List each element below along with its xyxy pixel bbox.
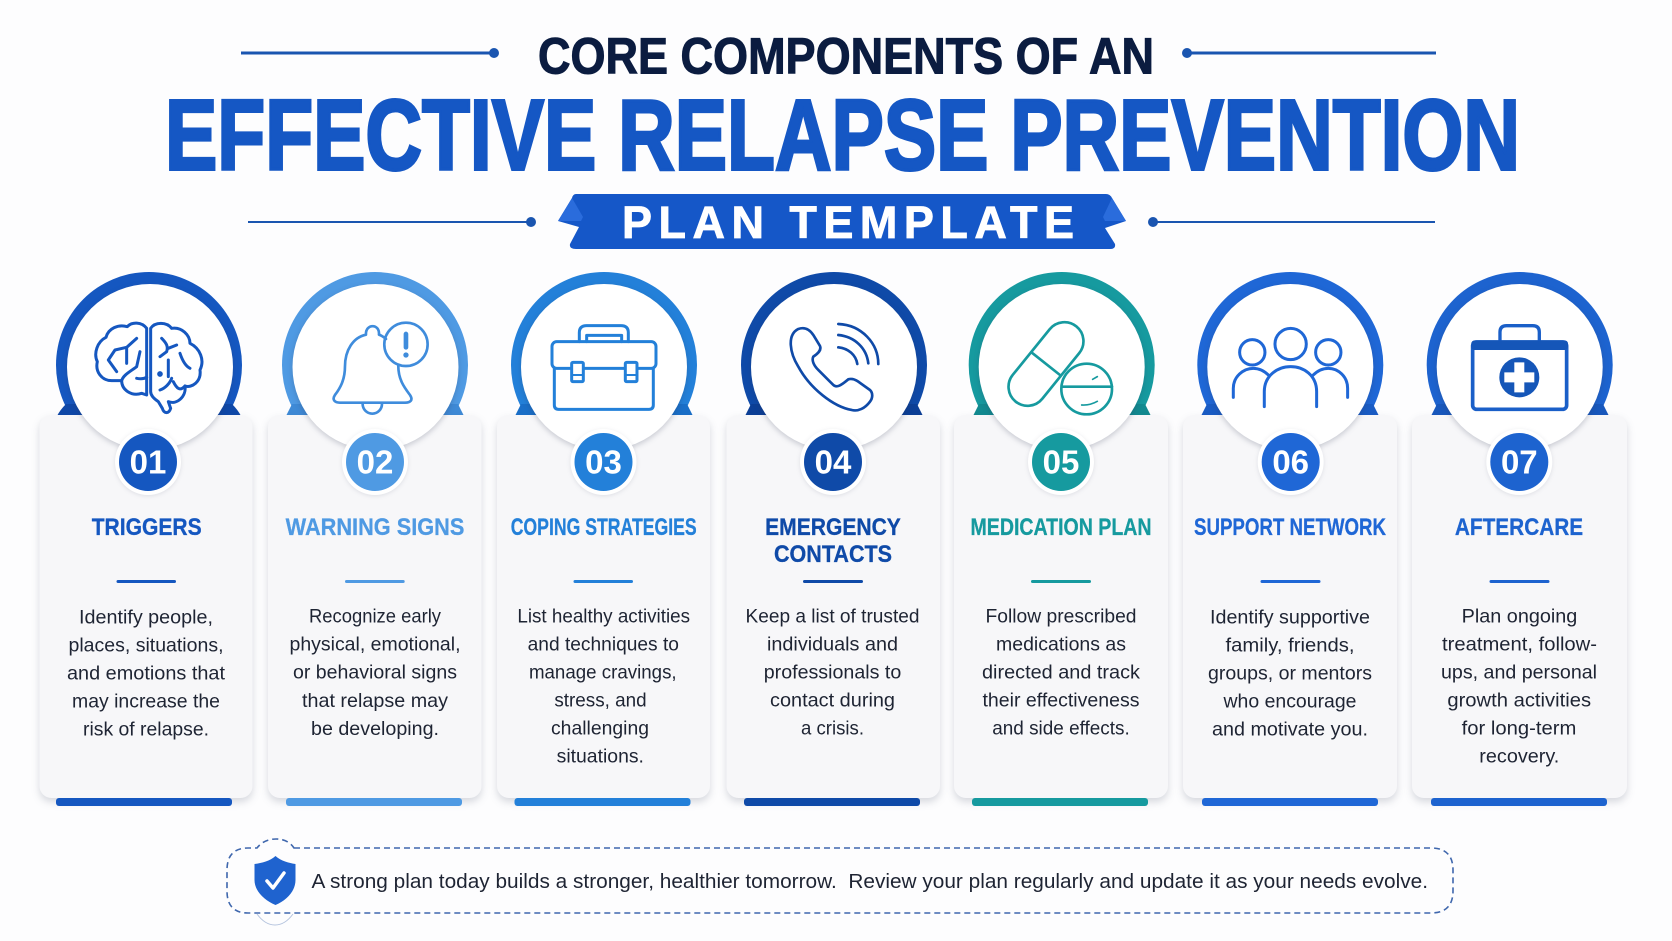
- text 04: [746, 606, 920, 740]
- text 01: may increase the: [72, 690, 220, 712]
- text 06: Identify supportive: [1210, 606, 1370, 628]
- text 01: [67, 606, 226, 740]
- number badge 02: 02: [357, 444, 393, 480]
- icon: pills: [1001, 314, 1112, 414]
- panel: 03 coping strategies: [497, 272, 710, 806]
- divider 01: [116, 580, 176, 583]
- text 06: and motivate you.: [1212, 718, 1368, 740]
- icon disc 03: [521, 284, 687, 450]
- banner: plan template: [248, 194, 1435, 249]
- number badge 04: 04: [815, 444, 852, 480]
- text 07: recovery.: [1479, 746, 1559, 768]
- icon disc 07: [1437, 284, 1603, 450]
- ring 03: [511, 272, 697, 458]
- title line: core components: CORE COMPONENTS OF AN: [538, 28, 1154, 84]
- ring 01: [56, 272, 242, 458]
- text 06: who encourage: [1223, 690, 1356, 712]
- divider 04: [803, 580, 863, 583]
- ring 06: [1197, 272, 1383, 458]
- text 06: [1208, 606, 1372, 740]
- number badge 05: [1028, 429, 1094, 495]
- text 02: that relapse may: [302, 690, 448, 712]
- title line: core components: [241, 28, 1436, 84]
- text 04: professionals to: [764, 662, 901, 684]
- divider 07: [1490, 580, 1550, 583]
- icon: people group: [1233, 328, 1348, 407]
- text 07: for long-term: [1462, 718, 1576, 740]
- number badge 07: [1486, 429, 1552, 495]
- text 05: their effectiveness: [982, 690, 1140, 712]
- number badge 03: 03: [585, 444, 622, 480]
- text 04: contact during: [770, 690, 895, 712]
- heading 04: CONTACTS: [774, 541, 892, 568]
- callout: footer message: [227, 839, 1453, 925]
- heading 06: SUPPORT NETWORK: [1194, 514, 1387, 541]
- card 06: [1183, 415, 1397, 806]
- icon: first aid kit: [1471, 326, 1568, 409]
- divider 02: [345, 580, 405, 583]
- number badge 01: [115, 429, 181, 495]
- panel: 02 warning signs: [268, 272, 482, 806]
- dashed callout frame: [227, 839, 1453, 925]
- text 05: medications as: [996, 634, 1126, 656]
- number badge 01: 01: [130, 444, 166, 480]
- text 01: places, situations,: [68, 634, 224, 656]
- text 04: a crisis.: [801, 718, 864, 740]
- text 03: and techniques to: [528, 634, 679, 656]
- card 03: [497, 415, 710, 806]
- text 04: individuals and: [767, 634, 898, 656]
- text 07: growth activities: [1447, 690, 1591, 712]
- icon disc 01: [67, 284, 233, 450]
- icon: brain: [96, 323, 202, 413]
- text 03: stress, and: [554, 690, 647, 712]
- ring 07: [1427, 272, 1613, 458]
- footer text: A strong plan today builds a stronger, healthier tomorrow. Review your plan regularly and update it as your needs evolve.: [312, 870, 1428, 893]
- number badge 04: [800, 429, 866, 495]
- icon disc 02: [292, 284, 458, 450]
- panel: 06 support network: [1183, 272, 1397, 806]
- text 02: or behavioral signs: [293, 662, 457, 684]
- text 03: manage cravings,: [529, 662, 677, 684]
- icon: phone with signal: [791, 324, 878, 410]
- number badge 05: 05: [1043, 444, 1079, 480]
- divider 03: [574, 580, 633, 583]
- text 01: Identify people,: [79, 606, 213, 628]
- text 02: [290, 606, 460, 740]
- icon: shield check: [254, 856, 296, 905]
- panel: 01 triggers: [40, 272, 252, 806]
- number badge 06: 06: [1272, 444, 1309, 480]
- text 07: treatment, follow-: [1442, 634, 1597, 656]
- card 01: [40, 415, 252, 806]
- text 05: directed and track: [982, 662, 1140, 684]
- heading 03: COPING STRATEGIES: [511, 514, 697, 541]
- text 02: physical, emotional,: [290, 634, 460, 656]
- card 02: [268, 415, 482, 806]
- number badge 02: [342, 429, 408, 495]
- ring 05: [969, 272, 1155, 458]
- icon: bell with alert: [334, 323, 428, 414]
- text 03: challenging: [551, 718, 649, 740]
- text 03: [517, 606, 690, 768]
- heading 07: AFTERCARE: [1455, 514, 1583, 541]
- text 05: and side effects.: [992, 718, 1130, 740]
- number badge 07: 07: [1501, 444, 1538, 480]
- banner: plan template: PLAN TEMPLATE: [622, 197, 1074, 248]
- text 05: [982, 606, 1140, 740]
- heading 04: EMERGENCY: [765, 514, 901, 541]
- heading 04: [765, 514, 901, 568]
- text 02: Recognize early: [309, 606, 441, 628]
- text 03: situations.: [557, 746, 644, 768]
- heading 01: TRIGGERS: [92, 514, 202, 541]
- text 07: ups, and personal: [1441, 662, 1597, 684]
- heading 05: MEDICATION PLAN: [970, 514, 1152, 541]
- card 05: [954, 415, 1168, 806]
- text 06: groups, or mentors: [1208, 662, 1372, 684]
- text 04: Keep a list of trusted: [746, 606, 920, 628]
- text 03: List healthy activities: [517, 606, 690, 628]
- panel: 05 medication plan: [954, 272, 1168, 806]
- text 07: [1441, 606, 1597, 768]
- panel: 04 emergency contacts: [726, 272, 940, 806]
- card 04: [726, 415, 940, 806]
- number badge 03: [570, 429, 636, 495]
- text 02: be developing.: [311, 718, 439, 740]
- ring 04: [741, 272, 927, 458]
- heading 02: WARNING SIGNS: [286, 514, 464, 541]
- icon: toolbox: [552, 326, 656, 409]
- number badge 06: [1258, 429, 1324, 495]
- divider 06: [1260, 580, 1320, 583]
- icon disc 06: [1207, 284, 1373, 450]
- divider 05: [1031, 580, 1091, 583]
- icon disc 04: [751, 284, 917, 450]
- ring 02: [282, 272, 468, 458]
- text 05: Follow prescribed: [986, 606, 1136, 628]
- card 07: [1412, 415, 1627, 806]
- icon disc 05: [979, 284, 1145, 450]
- text 01: risk of relapse.: [83, 718, 209, 740]
- panel: 07 aftercare: [1412, 272, 1627, 806]
- text 06: family, friends,: [1226, 634, 1354, 656]
- text 01: and emotions that: [67, 662, 226, 684]
- text 07: Plan ongoing: [1462, 606, 1577, 628]
